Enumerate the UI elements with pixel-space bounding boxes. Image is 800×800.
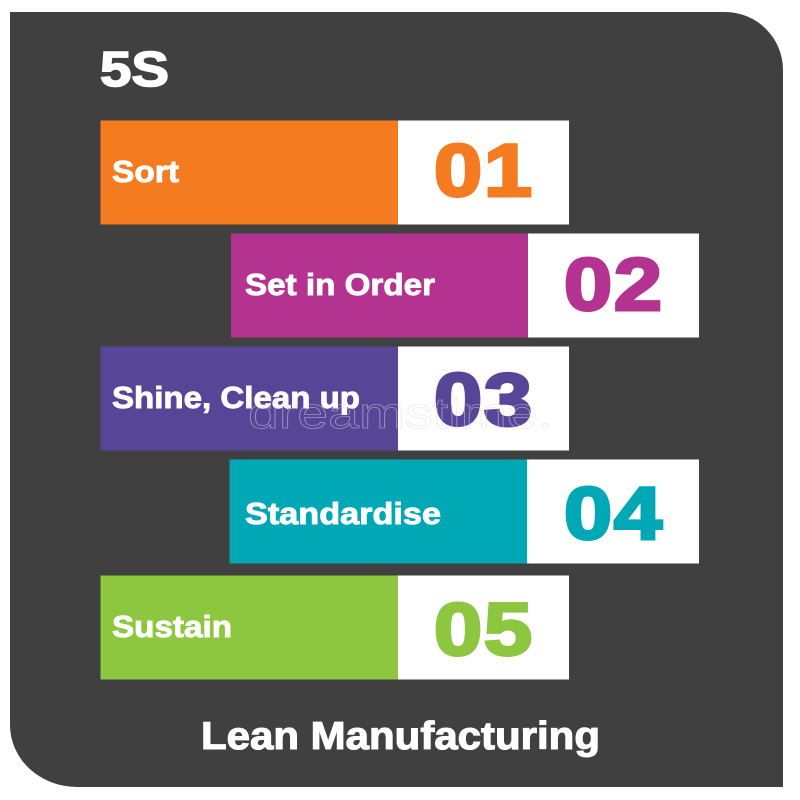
step 05: Sustain: Sustain (112, 609, 232, 644)
step 01: Sort (100, 120, 569, 224)
step 05: Sustain: 05 (434, 589, 534, 672)
title: 5S: 5S (100, 43, 169, 97)
step 01: Sort: 01 (434, 130, 534, 213)
step 03: Shine, Clean up (100, 346, 569, 450)
step 01: Sort: Sort (112, 154, 179, 189)
step 04: Standardise (230, 460, 699, 564)
step 02: Set in Order (231, 234, 699, 338)
step 05: Sustain (100, 576, 569, 680)
step 03: Shine, Clean up: 03 (434, 359, 534, 442)
step 02: Set in Order: Set in Order (245, 267, 435, 302)
step 04: Standardise: 04 (564, 473, 664, 556)
step 03: Shine, Clean up: Shine, Clean up (112, 380, 360, 415)
footer heading: Lean Manufacturing: Lean Manufacturing (201, 715, 600, 758)
watermark: dreamstime. (248, 389, 553, 438)
step 04: Standardise: Standardise (245, 496, 441, 531)
step 02: Set in Order: 02 (564, 244, 664, 327)
